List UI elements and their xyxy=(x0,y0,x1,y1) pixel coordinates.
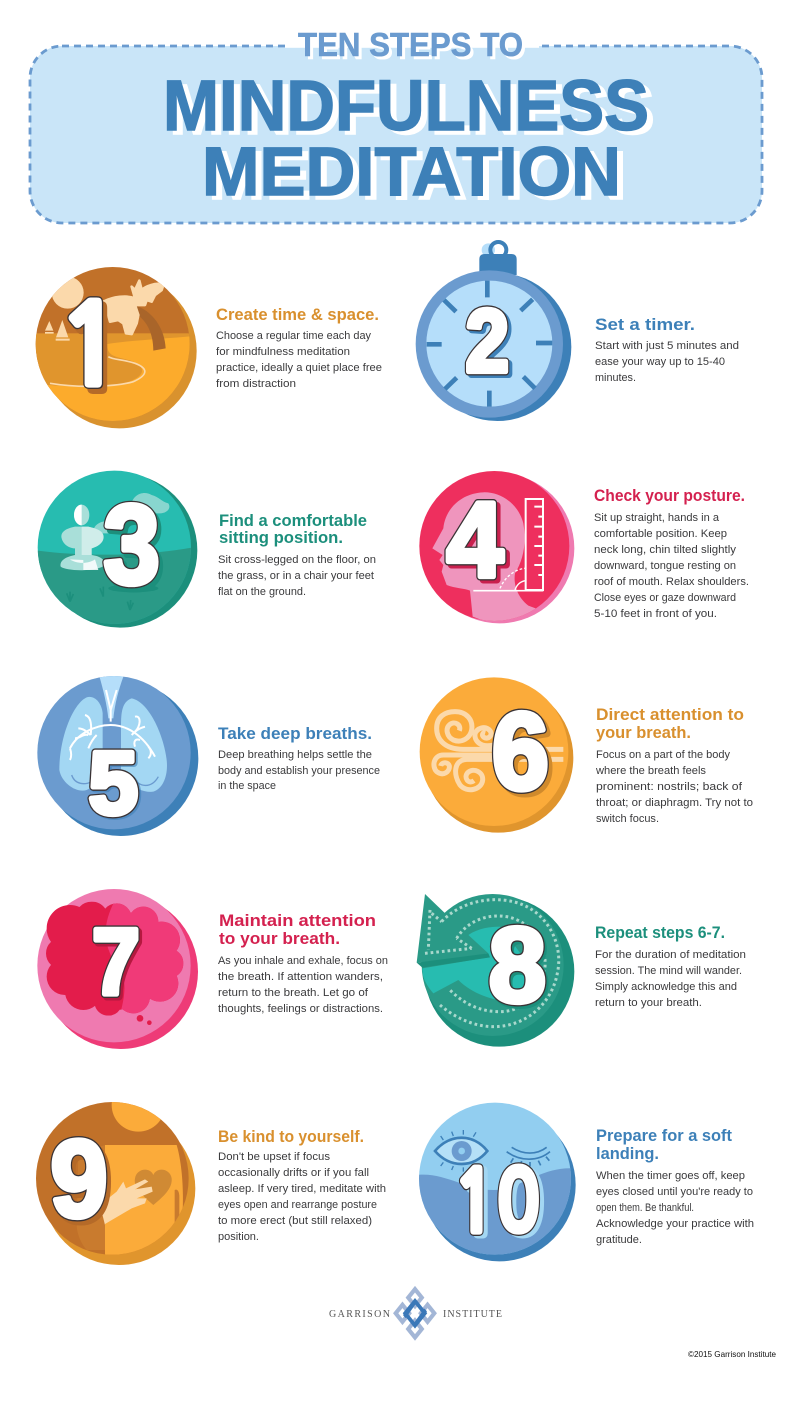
body text: neck long, chin tilted slightly xyxy=(594,544,737,556)
icon: open and closed eyes with number 10: 10 xyxy=(453,1160,540,1244)
icon: seated figure with number 3: 3 xyxy=(103,481,160,607)
body text: Sit cross-legged on the floor, on xyxy=(218,554,376,566)
body text: minutes. xyxy=(595,372,636,384)
icon: circular arrow with number 8: 8 xyxy=(489,906,546,1024)
body text: asleep. If very tired, meditate with xyxy=(218,1183,386,1195)
body text: eyes open and rearrange posture xyxy=(218,1199,377,1211)
icon: head profile and ruler with number 4: 4 xyxy=(450,483,507,603)
title banner xyxy=(30,26,762,223)
body text: Simply acknowledge this and xyxy=(595,981,737,993)
icon: timer with number 2: 2 xyxy=(466,290,509,390)
body text xyxy=(218,554,376,598)
icon: head profile and ruler with number 4: 4 xyxy=(447,479,503,599)
body text: switch focus. xyxy=(596,813,659,825)
icon: hand on heart with number 9: 9 xyxy=(54,1122,111,1245)
heading: landing. xyxy=(596,1145,659,1163)
icon: breath swirls with number 6: 6 xyxy=(492,690,549,813)
body text xyxy=(596,1170,754,1246)
icon: timer with number 2: 2 xyxy=(466,290,509,390)
body text: where the breath feels xyxy=(595,765,706,777)
icon: lungs with number 5: 5 xyxy=(90,734,140,834)
body text: return to your breath. xyxy=(595,997,702,1009)
body text: thoughts, feelings or distractions. xyxy=(218,1003,383,1015)
icon: seated figure with number 3: 3 xyxy=(107,485,163,611)
icon: lungs with number 5: 5 xyxy=(89,733,138,833)
icon: thought cloud with number 7 xyxy=(33,889,200,1049)
body text: Deep breathing helps settle the xyxy=(218,749,372,761)
body text: Close eyes or gaze downward xyxy=(594,592,736,604)
icon: breath swirls with number 6: 6 xyxy=(492,690,549,813)
banner panel xyxy=(30,46,762,223)
body text: ease your way up to 15-40 xyxy=(595,356,725,368)
heading xyxy=(596,1127,733,1163)
body text: for mindfulness meditation xyxy=(216,346,350,358)
icon: circular arrow with number 8: 8 xyxy=(489,906,546,1024)
icon: hand on heart with number 9: 9 xyxy=(50,1117,107,1240)
body text xyxy=(218,1151,386,1243)
body text: comfortable position. Keep xyxy=(594,528,727,540)
icon: circular arrow with number 8 xyxy=(417,894,574,1047)
icon: timer with number 2 xyxy=(416,242,571,421)
heading: sitting position. xyxy=(219,529,343,547)
step 5 xyxy=(37,675,380,836)
body text: Choose a regular time each day xyxy=(216,330,371,342)
body text: eyes closed until you're ready to xyxy=(596,1186,753,1198)
heading: Take deep breaths. xyxy=(218,725,372,743)
body text: to more erect (but still relaxed) xyxy=(218,1215,372,1227)
body text: return to the breath. Let go of xyxy=(218,987,369,999)
body text xyxy=(595,949,746,1009)
step 9 xyxy=(36,1102,386,1265)
heading: Find a comfortable xyxy=(219,512,367,530)
icon: breath swirls with number 6 xyxy=(420,677,573,833)
body text xyxy=(595,340,739,384)
icon: open and closed eyes with number 10 xyxy=(417,1103,576,1263)
heading: Create time & space. xyxy=(216,306,379,324)
body text: from distraction xyxy=(216,378,296,390)
body text: flat on the ground. xyxy=(218,586,306,598)
title line: mindfulness: MINDFULNESS xyxy=(169,71,655,150)
body text: Focus on a part of the body xyxy=(596,749,730,761)
body text: 5-10 feet in front of you. xyxy=(594,608,717,620)
icon: lungs with number 5: 5 xyxy=(89,733,138,833)
body text: body and establish your presence xyxy=(218,765,380,777)
body text xyxy=(218,955,388,1015)
icon: endless knot logo xyxy=(396,1289,434,1337)
icon: timer with number 2: 2 xyxy=(469,293,512,393)
icon: breath swirls with number 6: 6 xyxy=(495,693,552,816)
body text xyxy=(218,749,380,792)
body text: throat; or diaphragm. Try not to xyxy=(596,797,753,809)
title line: ten steps to: TEN STEPS TO xyxy=(301,29,526,66)
title line: ten steps to: TEN STEPS TO xyxy=(298,26,523,63)
icon: head profile and ruler with number 4 xyxy=(419,471,574,627)
icon: beach with number 1: 1 xyxy=(61,296,129,407)
step 3 xyxy=(33,471,376,633)
body text: When the timer goes off, keep xyxy=(596,1170,745,1182)
icon: hand on heart with number 9: 9 xyxy=(50,1117,107,1240)
heading: Repeat steps 6-7. xyxy=(595,924,725,942)
icon: open and closed eyes with number 10: 10 xyxy=(457,1163,544,1247)
heading xyxy=(219,912,376,948)
icon: beach with number 1: 1 xyxy=(57,291,125,402)
icon: thought cloud with number 7: 7 xyxy=(92,910,140,1014)
body text: For the duration of meditation xyxy=(595,949,746,961)
heading xyxy=(596,706,744,742)
body text xyxy=(594,512,749,620)
title line: meditation: MEDITATION xyxy=(202,133,621,210)
body text: gratitude. xyxy=(596,1234,642,1246)
icon: seated figure with number 3: 3 xyxy=(103,481,160,607)
logo: Garrison Institute xyxy=(329,1289,502,1337)
body text: Start with just 5 minutes and xyxy=(595,340,739,352)
step 8 xyxy=(417,894,746,1047)
step 2 xyxy=(416,242,739,421)
body text: the grass, or in a chair your feet xyxy=(218,570,374,582)
heading: Check your posture. xyxy=(594,487,745,505)
icon: head profile and ruler with number 4: 4 xyxy=(447,479,503,599)
step 6 xyxy=(420,677,753,833)
body text: Sit up straight, hands in a xyxy=(594,512,720,524)
step 10 xyxy=(417,1103,754,1263)
body text xyxy=(595,749,753,825)
icon: hand on heart with number 9 xyxy=(36,1102,196,1265)
heading: Set a timer. xyxy=(595,316,695,334)
icon: thought cloud with number 7: 7 xyxy=(92,910,140,1014)
body text: prominent: nostrils; back of xyxy=(596,781,743,793)
copyright: ©2015 Garrison Institute xyxy=(688,1349,776,1359)
heading: Prepare for a soft xyxy=(596,1127,733,1145)
body text: position. xyxy=(218,1231,259,1243)
body text: Acknowledge your practice with xyxy=(596,1218,754,1230)
body text: open them. Be thankful. xyxy=(596,1202,694,1214)
body text: Don't be upset if focus xyxy=(218,1151,331,1163)
body text: downward, tongue resting on xyxy=(594,560,736,572)
icon: seated figure with number 3 xyxy=(33,471,197,633)
body text: the breath. If attention wanders, xyxy=(218,971,383,983)
heading xyxy=(219,512,367,547)
body text: As you inhale and exhale, focus on xyxy=(218,955,388,967)
heading: your breath. xyxy=(596,724,691,742)
body text: roof of mouth. Relax shoulders. xyxy=(594,576,749,588)
body text: practice, ideally a quiet place free xyxy=(216,362,382,374)
step 1 xyxy=(30,267,382,440)
heading: to your breath. xyxy=(219,930,340,948)
body text xyxy=(216,330,382,390)
body text: occasionally drifts or if you fall xyxy=(218,1167,369,1179)
icon: beach with number 1: 1 xyxy=(57,291,125,402)
logo text: Institute: INSTITUTE xyxy=(443,1309,502,1320)
title line: meditation: MEDITATION xyxy=(208,137,627,214)
body text: in the space xyxy=(218,780,276,792)
step 7 xyxy=(33,889,388,1049)
icon: circular arrow with number 8: 8 xyxy=(491,909,548,1027)
icon: thought cloud with number 7: 7 xyxy=(94,912,142,1016)
title line: mindfulness: MINDFULNESS xyxy=(163,67,649,146)
step 4 xyxy=(419,471,749,627)
heading: Direct attention to xyxy=(596,706,744,724)
icon: beach with number 1 xyxy=(30,267,197,440)
logo text: Garrison: GARRISON xyxy=(329,1309,390,1320)
heading: Maintain attention xyxy=(219,912,376,930)
body text: session. The mind will wander. xyxy=(595,965,742,977)
heading: Be kind to yourself. xyxy=(218,1128,364,1146)
icon: lungs with number 5 xyxy=(37,675,198,836)
icon: open and closed eyes with number 10: 10 xyxy=(453,1160,540,1244)
